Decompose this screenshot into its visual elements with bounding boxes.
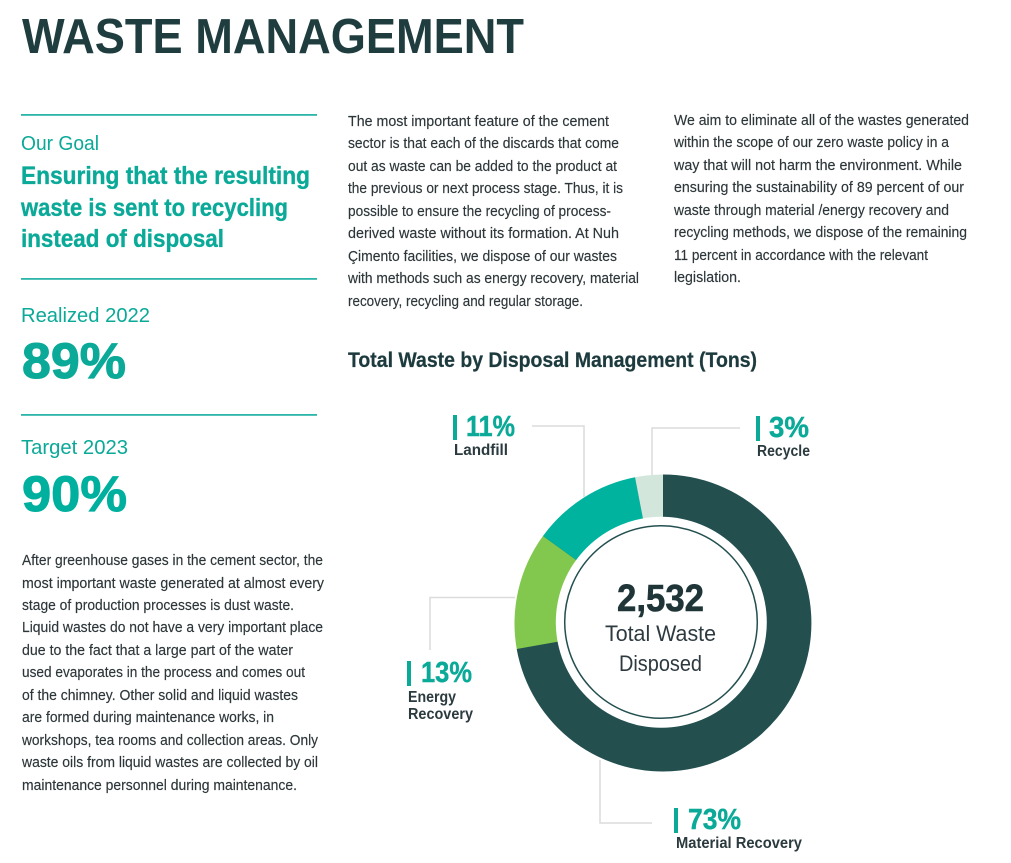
chart heading: Total Waste by Disposal Management (Tons) (348, 349, 757, 372)
text block: dust waste: used evaporates in the process and comes out (22, 665, 305, 681)
text block: dust waste: are formed during maintenance works, in (22, 710, 274, 726)
text block: cement sector feature: derived waste without its formation. At Nuh (348, 226, 619, 242)
segment: landfill 11% (543, 477, 663, 623)
text block: zero waste aim: ensuring the sustainability of 89 percent of our (674, 180, 964, 196)
text block: cement sector feature: the previous or next process stage. Thus, it is (348, 181, 623, 197)
text block: zero waste aim: recycling methods, we dispose of the remaining (674, 225, 967, 241)
centre caption (605, 621, 716, 676)
text block: zero waste aim (673, 113, 969, 286)
panel: realized 2022: Realized 2022 (21, 304, 150, 327)
label: energy recovery: Energy (408, 689, 456, 706)
leader lines (430, 426, 740, 823)
text block: dust waste: waste oils from liquid wastes are collected by oil (21, 755, 318, 771)
segment: material recovery 73% (517, 474, 811, 771)
text block: cement sector feature: sector is that each of the discards that come (348, 136, 619, 152)
label: energy recovery: Recovery (408, 706, 473, 723)
text block: dust waste: After greenhouse gases in the cement sector, the (22, 553, 323, 569)
text block: zero waste aim: legislation. (674, 270, 741, 286)
text block: zero waste aim: 11 percent in accordance with the relevant (674, 248, 928, 264)
centre caption: Total Waste (605, 621, 716, 646)
panel: our goal: instead of disposal (21, 225, 224, 253)
text block: cement sector feature: with methods such as energy recovery, material (347, 271, 639, 287)
text block: dust waste: maintenance personnel during maintenance. (22, 778, 297, 794)
text block: zero waste aim: waste through material /energy recovery and (673, 203, 949, 219)
text block: cement sector feature: out as waste can be added to the product at (348, 159, 617, 175)
text block: cement sector feature: The most important feature of the cement (348, 114, 609, 130)
panel: our goal: waste is sent to recycling (20, 194, 288, 222)
centre total: 2,532 (617, 578, 704, 620)
text block: dust waste: of the chimney. Other solid and liquid wastes (22, 688, 298, 704)
title: WASTE MANAGEMENT (22, 10, 524, 64)
panel: our goal: Ensuring that the resulting (21, 162, 310, 190)
segment: energy recovery 13% (514, 536, 663, 649)
panel: our goal: Our Goal (21, 132, 99, 155)
panel: realized 2022: 89% (22, 333, 126, 389)
label: recycle: 3% (769, 412, 809, 444)
panel: our goal (20, 114, 317, 253)
centre disc (556, 517, 767, 728)
label: energy recovery: 13% (421, 657, 472, 689)
text block: dust waste: due to the fact that a large part of the water (22, 643, 293, 659)
text block: zero waste aim: within the scope of our zero waste policy in a (673, 135, 950, 151)
text block: zero waste aim: We aim to eliminate all of the wastes generated (674, 113, 969, 129)
panel: target 2023 (21, 414, 317, 522)
text block: dust waste: stage of production processes is dust waste. (22, 598, 294, 614)
text block: cement sector feature: Çimento facilities, we dispose of our wastes (348, 249, 617, 265)
text block: cement sector feature: possible to ensure the recycling of process- (348, 204, 611, 220)
label: recycle (756, 412, 810, 460)
panel: target 2023: 90% (22, 466, 127, 522)
label: material recovery: Material Recovery (676, 835, 802, 852)
text block: zero waste aim: way that will not harm the environment. While (673, 158, 962, 174)
label: material recovery (674, 804, 802, 852)
text block: dust waste: workshops, tea rooms and collection areas. Only (21, 733, 319, 749)
panel: target 2023: Target 2023 (21, 436, 128, 459)
text block: dust waste (21, 553, 325, 794)
label: energy recovery (407, 657, 473, 723)
text block: cement sector feature (347, 114, 639, 310)
label: material recovery: 73% (688, 804, 741, 836)
panel: realized 2022 (21, 278, 317, 389)
centre caption: Disposed (619, 651, 702, 676)
text block: dust waste: Liquid wastes do not have a very important place (22, 620, 323, 636)
inner ring (565, 526, 757, 718)
label: landfill: 11% (466, 411, 515, 443)
donut chart (514, 474, 811, 771)
text block: cement sector feature: recovery, recycling and regular storage. (348, 294, 583, 310)
label: landfill (453, 411, 515, 459)
text block: dust waste: most important waste generated at almost every (22, 576, 325, 592)
segment: recycle 3% (635, 474, 663, 623)
label: recycle: Recycle (757, 443, 810, 460)
label: landfill: Landfill (454, 442, 508, 459)
